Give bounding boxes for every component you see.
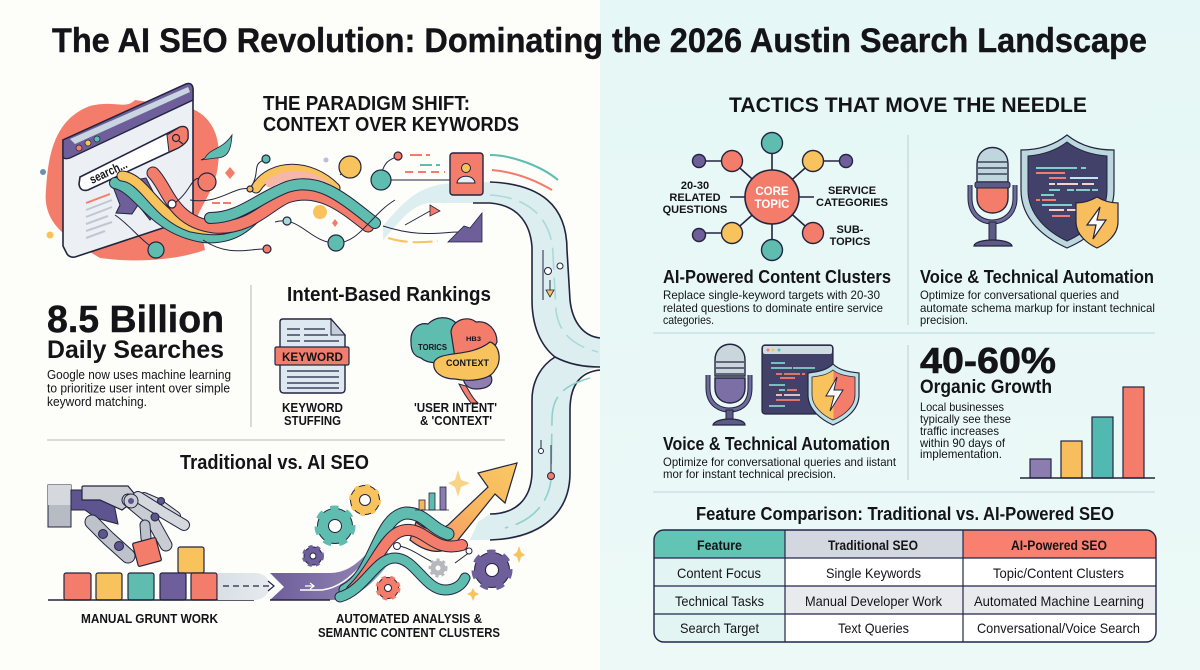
- sparkles: [448, 470, 470, 497]
- caption: keyword stuffing: KEYWORD: [282, 400, 343, 415]
- caption: keyword stuffing: [282, 400, 343, 428]
- icon: code window with shield: [762, 345, 859, 425]
- diagram: topic cluster: CORE: [755, 186, 789, 198]
- description: mor for instant technical precision.: [663, 467, 836, 481]
- stat: 8.5 billion daily searches: Daily Searches: [47, 336, 224, 364]
- icon: microphone: [708, 344, 750, 425]
- header row: Feature: [697, 538, 742, 553]
- network lines: [115, 156, 460, 251]
- user profile card: [450, 153, 483, 195]
- arrow: manual to automated transition: [218, 573, 274, 600]
- row: content focus: Content Focus: [677, 565, 761, 581]
- icon: keyword document: [275, 319, 349, 393]
- stat: 8.5 billion daily searches: keyword matching.: [47, 395, 147, 409]
- diagram: topic cluster: QUESTIONS: [663, 204, 727, 216]
- browser window: [63, 84, 193, 257]
- caption: automated analysis: AUTOMATED ANALYSIS &: [336, 612, 482, 626]
- tilted coral block: [132, 537, 162, 567]
- icon: brain with context: [411, 318, 499, 403]
- background: left panel: [0, 0, 600, 670]
- caption: automated analysis: [318, 612, 500, 640]
- stat: 8.5 billion daily searches: to prioritize user intent over simple: [47, 382, 230, 396]
- block row: [178, 547, 204, 573]
- row: search target: Text Queries: [838, 620, 909, 636]
- row: content focus: Topic/Content Clusters: [993, 565, 1124, 581]
- description: [920, 288, 1155, 327]
- trend mountain: [448, 213, 482, 242]
- description: Local businesses: [920, 400, 1004, 414]
- icon: microphone: [970, 148, 1015, 246]
- icon: keyword document: KEYWORD: [282, 350, 343, 364]
- description: precision.: [920, 313, 968, 327]
- illustration: robot hand stacking blocks: [48, 485, 254, 600]
- heading: feature comparison: Feature Comparison: Traditional vs. AI-Powered SEO: [696, 503, 1114, 524]
- play arrow: [430, 205, 440, 216]
- stat label: Organic Growth: [920, 377, 1052, 398]
- heading: Voice & Technical Automation: [663, 434, 890, 454]
- heading: the paradigm shift: [263, 93, 519, 136]
- background: right panel: [600, 0, 1200, 670]
- row: search target: Conversational/Voice Search: [977, 620, 1140, 636]
- heading: intent-based rankings: Intent-Based Rankings: [287, 284, 491, 306]
- heading: tactics that move the needle: TACTICS THAT MOVE THE NEEDLE: [729, 94, 1087, 117]
- diagram: topic cluster: CATEGORIES: [816, 197, 888, 209]
- icon: brain with context: TORICS: [418, 343, 448, 352]
- panel: voice and technical automation lower: [663, 344, 897, 481]
- header row: AI-Powered SEO: [1011, 538, 1107, 553]
- stat: 8.5 billion daily searches: [47, 299, 231, 409]
- icon: brain with context: HB3: [466, 337, 482, 343]
- title: The AI SEO Revolution: Dominating the 2026 Austin Search Landscape: [52, 22, 1147, 60]
- description: [919, 400, 1011, 461]
- row: search target: [680, 620, 1140, 636]
- description: [663, 288, 883, 327]
- diagram: topic cluster: SERVICE: [828, 185, 876, 197]
- flag: [201, 135, 232, 160]
- row: technical tasks: Automated Machine Learning: [974, 593, 1144, 609]
- stat: 8.5 billion daily searches: Google now uses machine learning: [47, 368, 231, 382]
- illustration: automated analysis ribbons and gears: [270, 463, 525, 601]
- table: feature comparison: [654, 530, 1156, 642]
- header row: [697, 538, 1107, 553]
- header row: Traditional SEO: [828, 538, 918, 553]
- row: technical tasks: [675, 593, 1144, 609]
- diagram: topic cluster: TOPICS: [830, 236, 870, 248]
- description: categories.: [663, 313, 714, 327]
- diagram: topic cluster: RELATED: [669, 192, 721, 204]
- description: Optimize for conversational queries and iistant: [663, 455, 897, 469]
- row: content focus: Single Keywords: [826, 565, 921, 581]
- row: technical tasks: Technical Tasks: [675, 593, 764, 609]
- bar chart: [1020, 387, 1155, 478]
- caption: user intent and context: 'USER INTENT': [414, 400, 497, 415]
- description: [663, 455, 897, 481]
- diagram: topic cluster: TOPIC: [755, 199, 789, 211]
- stat number: 40-60%: [920, 340, 1056, 381]
- data streams: [112, 169, 375, 237]
- big growth arrow: [410, 463, 517, 551]
- mini bar chart: [415, 487, 449, 510]
- search box text: search...: [87, 157, 130, 187]
- description: automate schema markup for instant technical: [920, 301, 1155, 315]
- panel: organic growth stat: [919, 340, 1155, 478]
- description: Replace single-keyword targets with 20-30: [663, 288, 880, 302]
- icon: brain with context: CONTEXT: [446, 358, 489, 368]
- heading: AI-Powered Content Clusters: [663, 267, 891, 287]
- description: related questions to dominate entire service: [663, 301, 883, 315]
- gears: [304, 486, 510, 599]
- heading: Voice & Technical Automation: [920, 267, 1154, 287]
- diagram: topic cluster: [663, 132, 888, 260]
- caption: keyword stuffing: STUFFING: [284, 413, 341, 428]
- icon: code shield: [1021, 135, 1118, 248]
- coral blob: [46, 100, 219, 260]
- description: traffic increases: [920, 424, 999, 438]
- row: technical tasks: Manual Developer Work: [805, 593, 943, 609]
- description: implementation.: [920, 447, 1002, 461]
- illustration: data road: [383, 182, 600, 540]
- caption: manual grunt work: MANUAL GRUNT WORK: [81, 612, 218, 626]
- network nodes: [148, 152, 402, 258]
- diagram: topic cluster: 20-30: [681, 180, 709, 192]
- heading: the paradigm shift: CONTEXT OVER KEYWORDS: [263, 114, 519, 136]
- heading: traditional vs ai seo: Traditional vs. AI SEO: [180, 452, 369, 474]
- panel: voice and technical automation upper: [920, 135, 1155, 327]
- caption: user intent and context: & 'CONTEXT': [420, 413, 492, 428]
- description: within 90 days of: [919, 436, 1006, 450]
- illustration: browser and flowing data streams: [40, 84, 558, 260]
- description: Optimize for conversational queries and: [920, 288, 1119, 302]
- heading: the paradigm shift: THE PARADIGM SHIFT:: [263, 93, 470, 115]
- caption: automated analysis: SEMANTIC CONTENT CLUSTERS: [318, 626, 500, 640]
- panel: ai-powered content clusters: [663, 132, 891, 327]
- stat: 8.5 billion daily searches: 8.5 Billion: [47, 299, 224, 341]
- row: content focus: [677, 565, 1124, 581]
- diagram: topic cluster: SUB-: [837, 224, 864, 236]
- row: search target: Search Target: [680, 620, 759, 636]
- caption: user intent and context: [414, 400, 497, 428]
- description: typically see these: [920, 412, 1011, 426]
